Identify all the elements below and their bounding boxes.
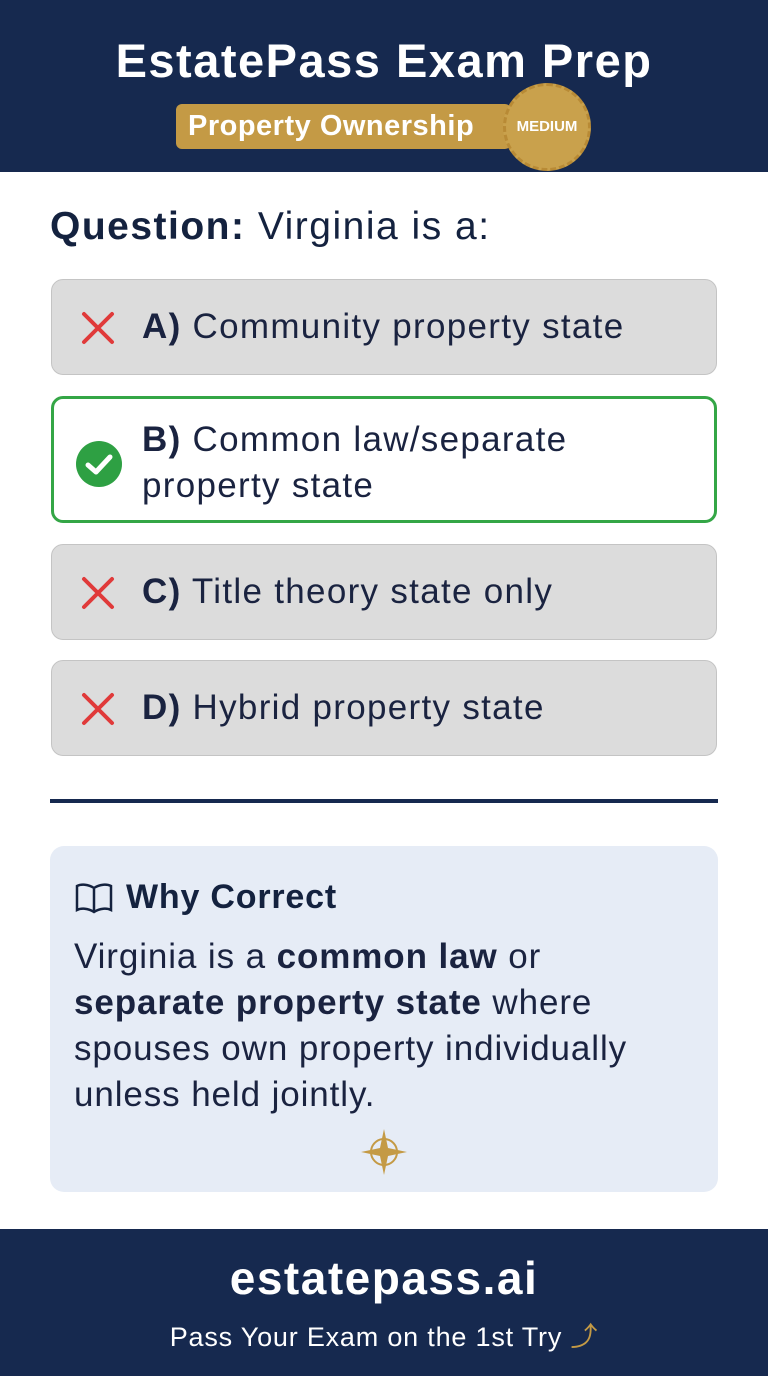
question: Question: Virginia is a: — [50, 205, 491, 248]
footer url: estatepass.ai — [230, 1252, 538, 1304]
icon: cross — [82, 312, 114, 344]
tagline: Pass Your Exam on the 1st Try ⤴ — [170, 1322, 598, 1352]
text block — [74, 937, 627, 1114]
icon: cross — [82, 576, 114, 610]
footer — [0, 1229, 768, 1376]
option D — [51, 660, 717, 756]
option D: D) Hybrid property state — [142, 688, 545, 727]
category pill — [176, 104, 511, 149]
text block: spouses own property individually — [74, 1029, 627, 1068]
option B (correct): property state — [142, 466, 374, 505]
difficulty badge: MEDIUM — [517, 118, 577, 135]
icon: cross — [82, 692, 114, 726]
icon: compass — [361, 1129, 407, 1175]
option B (correct): B) Common law/separate — [142, 420, 567, 459]
icon: check — [76, 441, 122, 487]
option A: A) Community property state — [142, 307, 624, 346]
difficulty badge — [503, 83, 591, 171]
header — [0, 0, 768, 172]
category pill: Property Ownership — [188, 110, 474, 142]
title: EstatePass Exam Prep — [116, 34, 652, 87]
text block: separate property state where — [74, 983, 592, 1022]
text block: Virginia is a common law or — [74, 937, 541, 976]
option C — [51, 544, 717, 640]
heading: why correct: Why Correct — [126, 878, 337, 916]
panel: explanation — [50, 846, 718, 1192]
option B (correct) — [51, 396, 717, 523]
option A — [51, 279, 717, 375]
option C: C) Title theory state only — [142, 572, 553, 611]
text block: unless held jointly. — [74, 1075, 375, 1114]
